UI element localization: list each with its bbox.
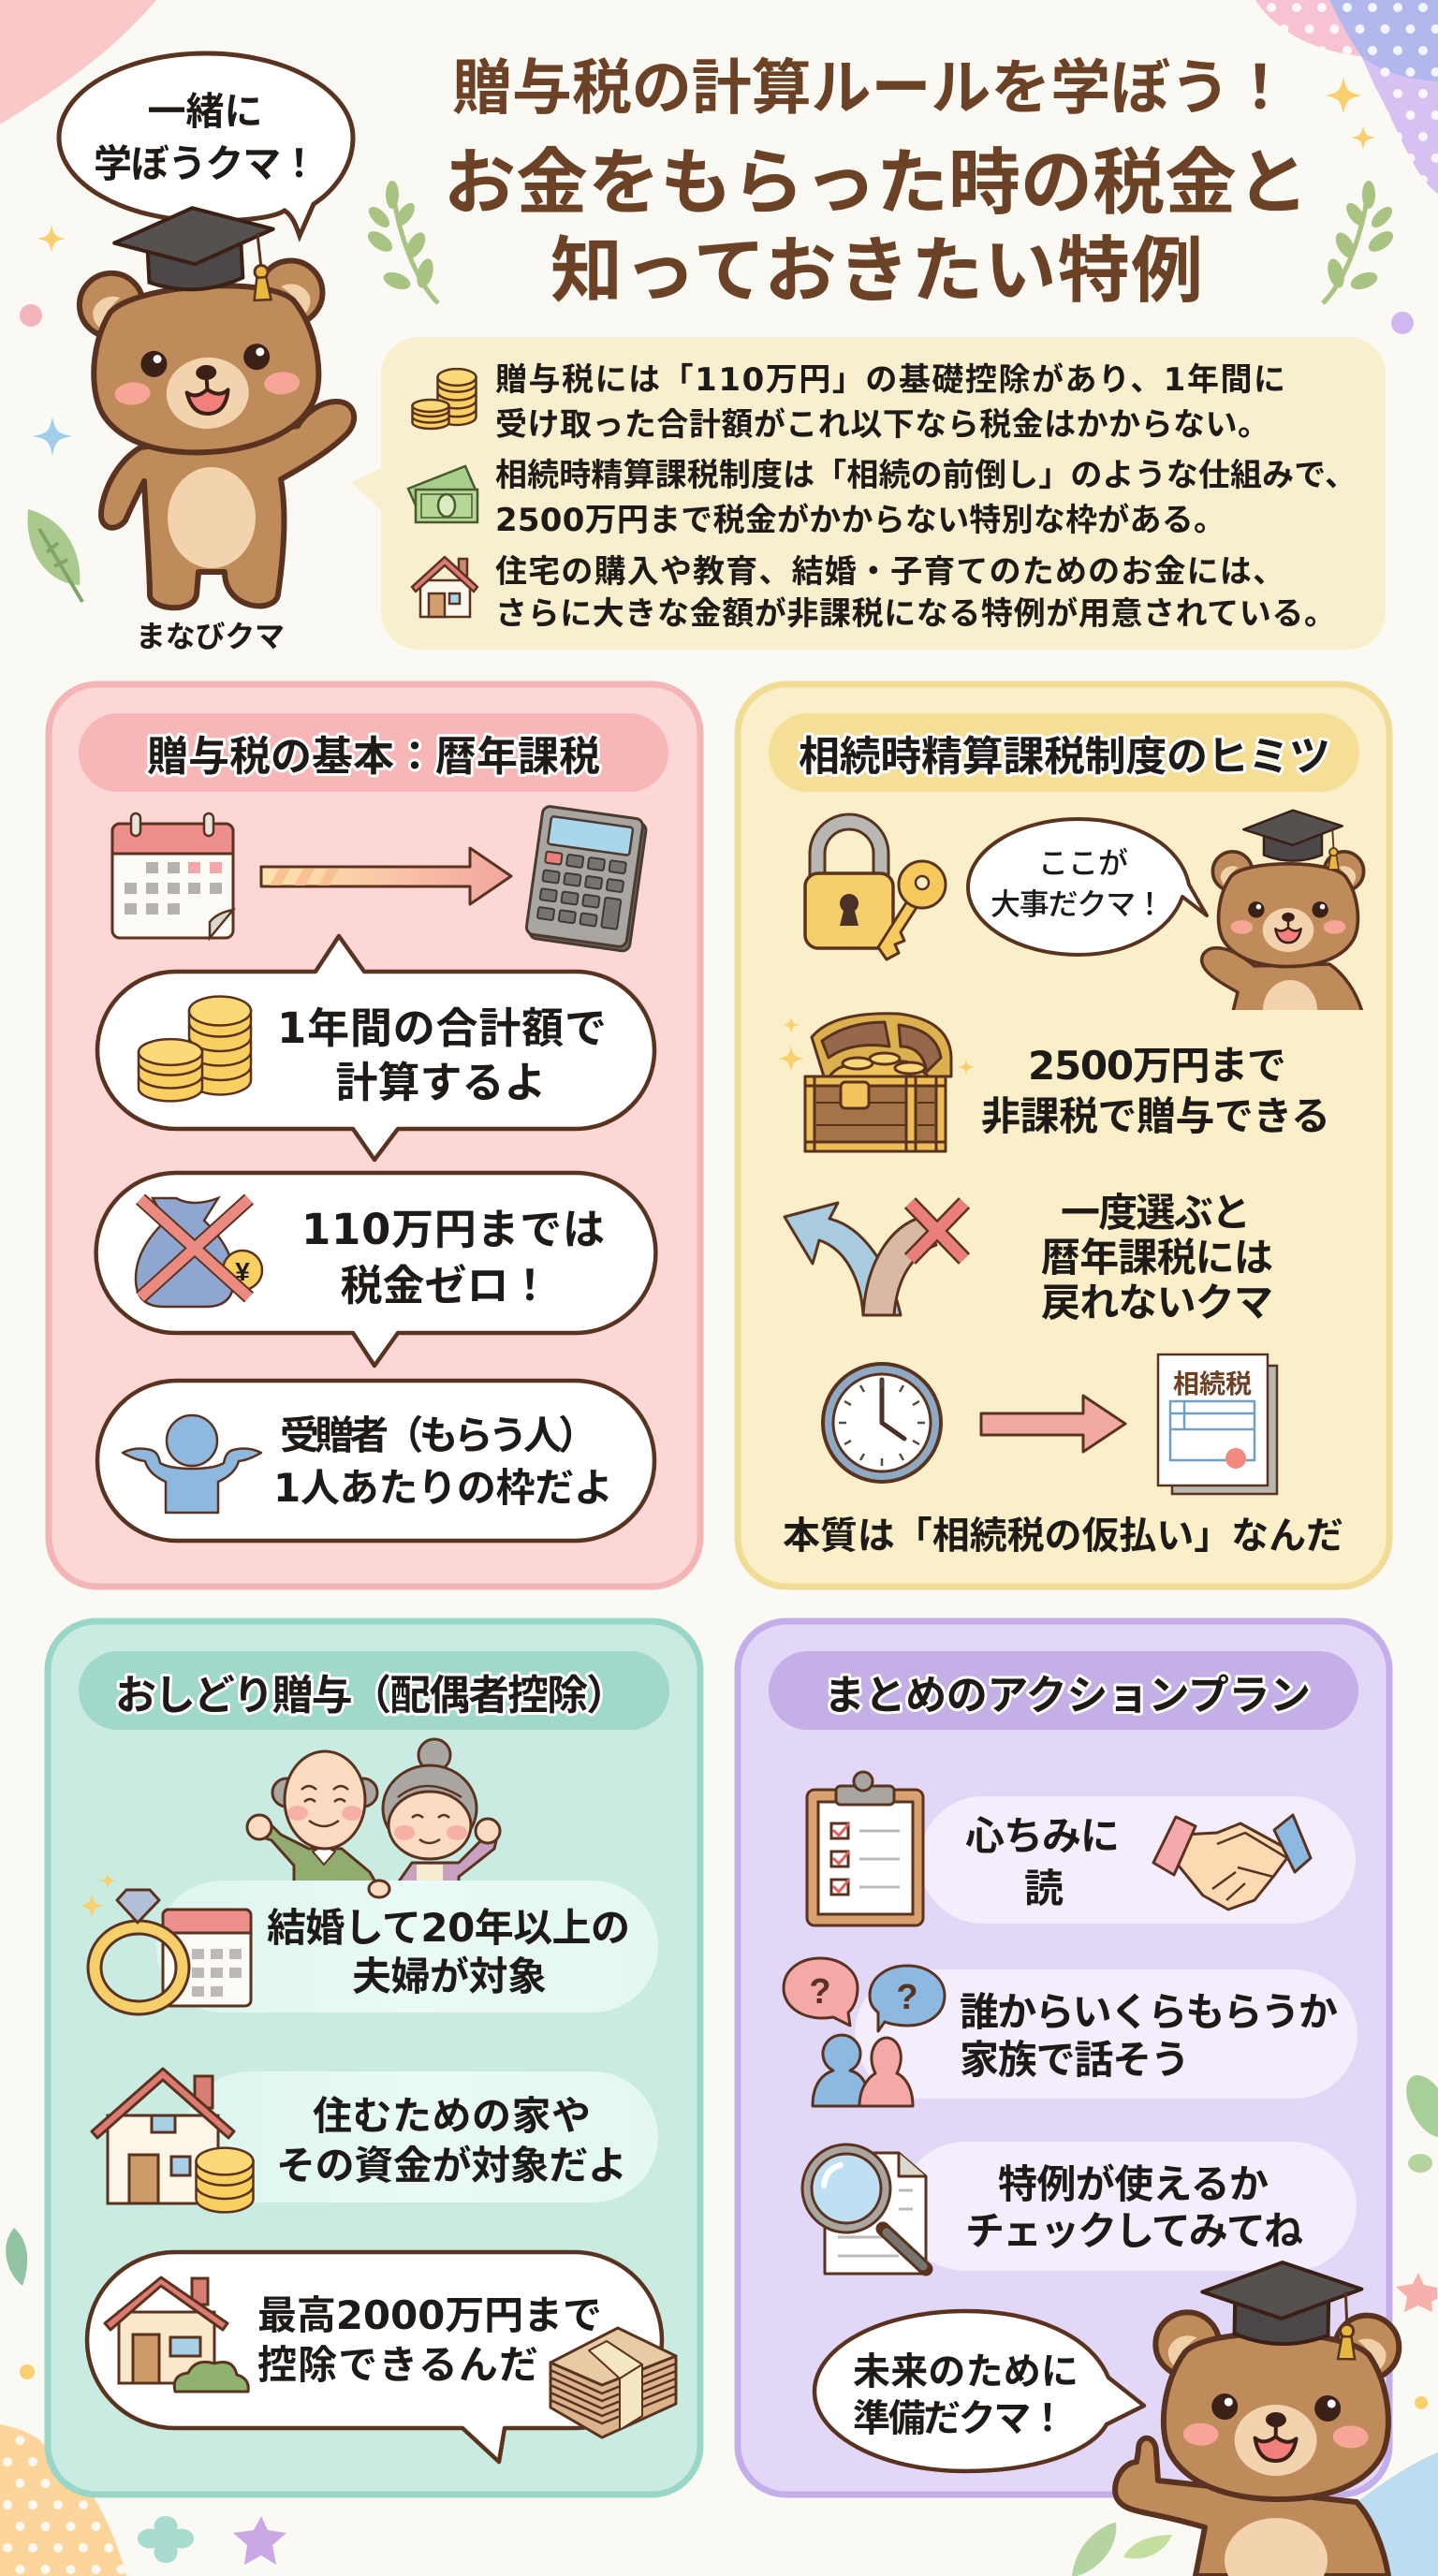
text: 2500万円: 非課税で贈与できる: [981, 1094, 1330, 1138]
pill: 心ちみに: 心ちみに: [965, 1814, 1120, 1858]
character: study bear: [78, 204, 354, 607]
bubble: 110万円: 110万円までは: [301, 1205, 605, 1254]
bubble: 未来のために: [814, 2311, 1144, 2471]
icon: treasure chest: [778, 1014, 975, 1151]
icon: calculator: [525, 806, 647, 952]
bubble: ここが大事だクマ: ここが: [1038, 846, 1128, 880]
decoration: bottom-right leaves, star, blob: [1072, 2068, 1438, 2576]
arrow: year to calculation: [261, 848, 511, 904]
decoration: right laurel: [1323, 181, 1397, 303]
illustration: elderly couple: [245, 1737, 502, 1881]
icon: forked road arrows: [785, 1203, 964, 1315]
icon: money bag crossed: ¥: [235, 1257, 250, 1286]
pill: 住むための家: その資金が対象だよ: [276, 2144, 627, 2188]
clasped hands: [369, 1881, 389, 1897]
icon: coins: [412, 369, 476, 429]
icon: house: [412, 557, 477, 617]
decoration: left laurel: [364, 181, 438, 303]
pill: 心ちみに: [807, 1772, 1356, 1925]
decoration: green leaf: [28, 509, 82, 602]
text: 一度選ぶと: [1041, 1191, 1273, 1325]
icon: handshake: [1153, 1815, 1311, 1910]
heading pill: [769, 1651, 1358, 1730]
summary box: [351, 337, 1386, 650]
heading pill: おしどり贈与（配偶者控除）: [115, 1673, 627, 1719]
speech bubble: 一緒に学ぼうクマ: 一緒に: [148, 90, 262, 133]
bubble: 受贈者: [97, 1381, 654, 1541]
text: 2500万円: [981, 1043, 1330, 1138]
pill: 特例が使えるか: チェックしてみてね: [965, 2209, 1303, 2253]
bubble: 1年間の合計額: 計算するよ: [335, 1059, 547, 1106]
summary texts: 2500万円まで税金がかからない特別な枠がある。: [495, 502, 1225, 539]
heading pill: 贈与税の基本：暦年課税: [147, 734, 600, 780]
panel: おしどり贈与: [48, 1621, 700, 2495]
pill: 心ちみに: 読: [1024, 1866, 1064, 1910]
pill: 結婚して20年: 夫婦が対象: [352, 1954, 547, 1998]
character: thumbs-up bear: [1115, 2261, 1400, 2576]
icon: family question bubbles: [784, 1958, 945, 2106]
pill: 住むための家: 住むための家や: [313, 2094, 591, 2138]
icon: banknotes: [408, 466, 477, 522]
summary texts: 贈与税には「110万円」の基礎控除があり、1年間に: [495, 361, 1285, 399]
pill: 特例が使えるか: 特例が使えるか: [998, 2162, 1269, 2206]
arrow: clock to document: [981, 1396, 1125, 1452]
summary texts: 受け取った合計額がこれ以下なら税金はかからない。: [495, 406, 1269, 443]
decoration: bottom-left small shapes: [6, 2228, 286, 2565]
summary texts: [495, 361, 1357, 632]
bubble: 最高2000万円: 最高2000万円まで: [257, 2292, 602, 2338]
summary texts: 住宅の購入や教育、結婚・子育てのためのお金には、: [495, 554, 1284, 590]
bubble: 110万円: 税金ゼロ！: [340, 1262, 551, 1310]
summary texts: 相続時精算課税制度は「相続の前倒し」のような仕組みで、: [495, 458, 1357, 493]
speech bubble: 一緒に学ぼうクマ: 学ぼうクマ！: [94, 142, 318, 185]
bubble: 110万円: [96, 1173, 655, 1366]
panel: アクションプラン: [738, 1621, 1389, 2495]
panel: 暦年課税: [49, 684, 700, 1587]
bubble: 最高2000万円: 控除できるんだ: [257, 2343, 538, 2387]
bubble: ここが大事だクマ: [968, 819, 1207, 955]
heading pill: [769, 713, 1359, 792]
title: [444, 54, 1309, 312]
pill: 誰からいくら: ?: [896, 1978, 918, 2017]
pill: 誰からいくら: 誰からいくらもらうか: [960, 1990, 1338, 2034]
icon: magnifier on document: [802, 2144, 926, 2274]
panel: 相続時精算課税制度: [738, 684, 1389, 1587]
pill: 特例が使えるか: [802, 2142, 1357, 2274]
decoration: sparkles and dots top: [20, 77, 1414, 456]
bubble: 受贈者: 1人あたりの枠だよ: [273, 1465, 613, 1511]
title: お金をもらった時の税金と: [444, 143, 1309, 224]
icon: lock and key: [805, 822, 946, 959]
character label: まなびクマ: [136, 620, 285, 653]
icon: tax document: [1158, 1354, 1277, 1494]
bubble: 受贈者: 受贈者（もらう人）: [280, 1413, 597, 1457]
pill: 結婚して20年: [80, 1872, 658, 2012]
heading pill: [79, 713, 668, 792]
pill: 誰からいくら: ?: [809, 1972, 831, 2012]
decoration: top-right dotted waves: [1255, 0, 1438, 194]
text: 2500万円: 2500万円まで: [1028, 1043, 1286, 1089]
bubble: 未来のために: 未来のために: [853, 2351, 1078, 2393]
pill: 住むための家: [92, 2069, 658, 2212]
icon: calendar: [112, 813, 233, 938]
icon: tax document: 相続税: [1173, 1369, 1252, 1398]
bubble: 1年間の合計額: 1年間の合計額で: [277, 1003, 607, 1053]
icon: clock: [823, 1364, 941, 1482]
summary texts: さらに大きな金額が非課税になる特例が用意されている。: [495, 595, 1336, 632]
text: 一度選ぶと: 戻れないクマ: [1041, 1281, 1273, 1325]
text: 一度選ぶと: 一度選ぶと: [1061, 1191, 1251, 1235]
icon: clipboard: [807, 1772, 923, 1925]
icon: house with coins: [92, 2069, 253, 2212]
pill: 誰からいくら: 家族で話そう: [960, 2038, 1190, 2082]
text: 一度選ぶと: 暦年課税には: [1041, 1236, 1273, 1280]
icon: money bag crossed: [136, 1198, 262, 1307]
bubble: 最高2000万円: [87, 2252, 676, 2462]
icon: money stack: [550, 2328, 676, 2437]
pill: 結婚して20年: 結婚して20年以上の: [267, 1905, 630, 1951]
pill: 誰からいくら: [784, 1958, 1357, 2106]
bubble: ここが大事だクマ: 大事だクマ！: [990, 887, 1165, 921]
title: 知っておきたい特例: [550, 231, 1203, 312]
icon: ring and calendar: [80, 1872, 251, 2008]
decoration: top-left pink corner: [0, 0, 156, 124]
bubble: 未来のために: 準備だクマ！: [853, 2398, 1066, 2439]
heading pill: 相続時精算課税制度のヒミツ: [799, 734, 1330, 780]
heading pill: まとめのアクションプラン: [824, 1673, 1311, 1719]
decoration: bottom-left dotted blob: [0, 2424, 126, 2576]
icon: person shrugging: [123, 1415, 261, 1513]
heading pill: [79, 1651, 669, 1730]
character: small bear: [1202, 811, 1364, 1016]
speech bubble: 一緒に学ぼうクマ: [59, 53, 353, 236]
title: 贈与税の計算ルールを学ぼう！: [452, 54, 1290, 122]
icon: house and bush: [105, 2277, 248, 2392]
bubble: 1年間の合計額: [97, 936, 654, 1160]
text: 本質は: 本質は「相続税の仮払い」なんだ: [783, 1515, 1343, 1557]
